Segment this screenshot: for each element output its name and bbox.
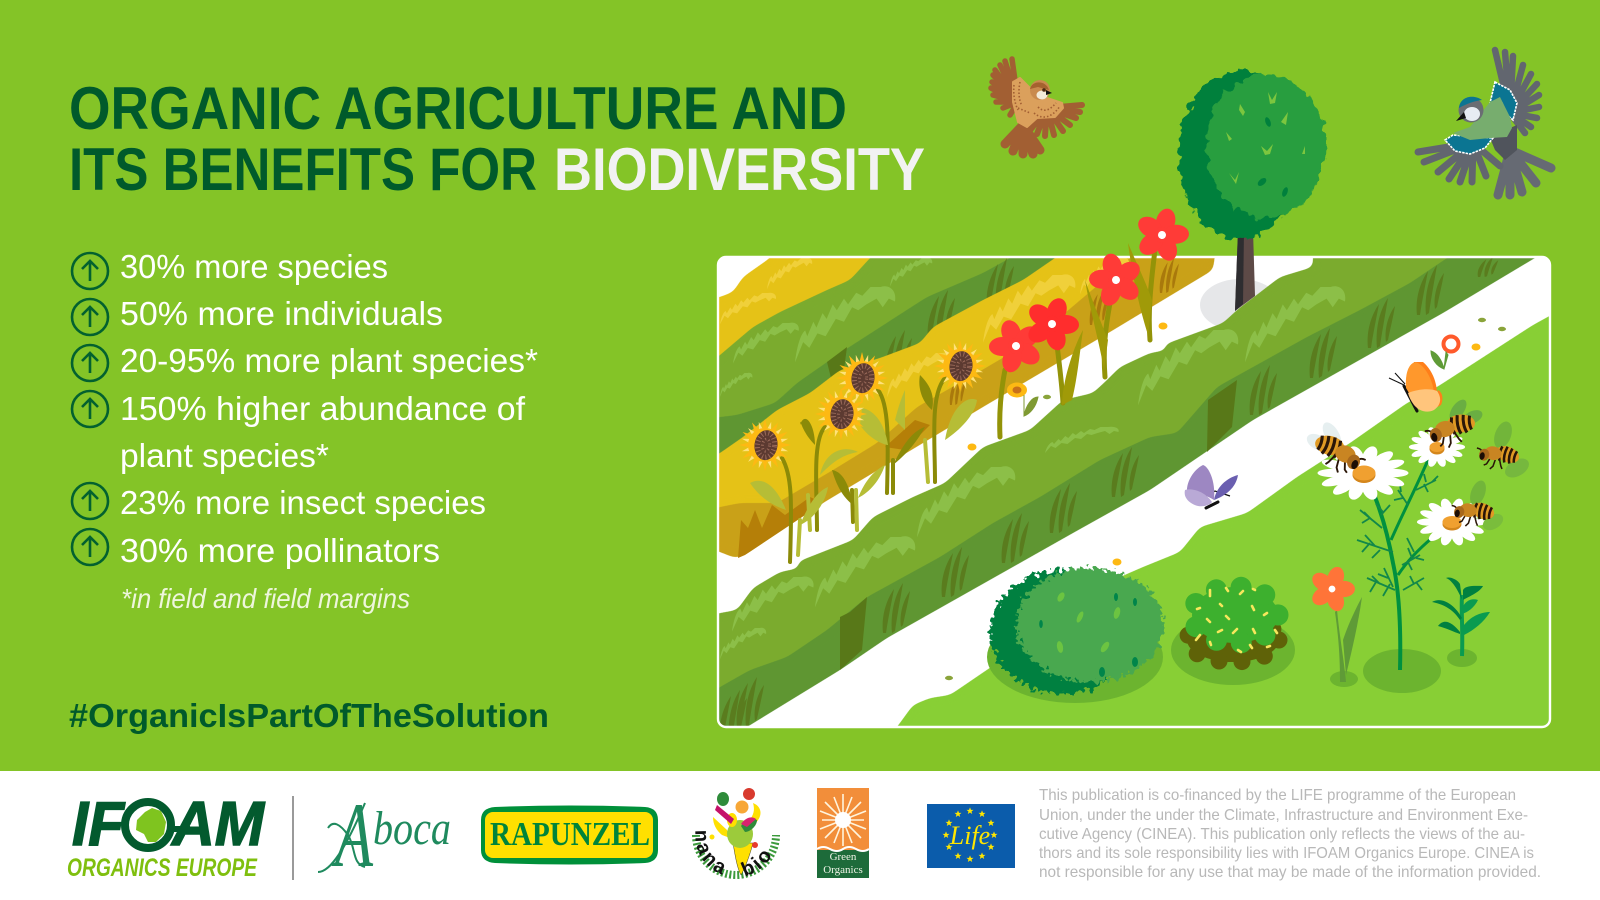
big shrub xyxy=(987,568,1164,703)
logo: IFOAM Organics Europe xyxy=(67,790,265,882)
tree canopy xyxy=(1178,71,1326,239)
disclaimer: cutive Agency (CINEA). This publication only reflects the views of the au- xyxy=(1039,826,1525,843)
logo: nanabio: nana xyxy=(695,831,724,874)
red flowers xyxy=(980,202,1197,437)
disclaimer: not responsible for any use that may be made of the information provided. xyxy=(1039,864,1541,881)
footer band xyxy=(0,771,1600,900)
daisy heads xyxy=(1318,445,1408,501)
blue tit xyxy=(1418,50,1551,195)
yellow crop row with sunflowers xyxy=(700,240,1217,558)
small green plant xyxy=(1432,577,1490,667)
sparrow body xyxy=(1013,78,1063,127)
sparrow tail xyxy=(1005,125,1040,154)
list item: 50% more individuals: 50% more individuals xyxy=(120,295,443,332)
tit wing bands xyxy=(1445,135,1493,154)
list item: 20-95% more plant species: 20-95% more plant species* xyxy=(120,342,538,379)
purple butterfly xyxy=(1185,465,1238,508)
sparrow left wing xyxy=(991,59,1018,115)
sunflowers xyxy=(736,337,989,562)
logo: IFOAM Organics Europe: IF xyxy=(72,790,126,859)
disclaimer: This publication is co-financed by the LIFE programme of the European xyxy=(1039,787,1516,804)
logo: Green Organics xyxy=(817,788,869,878)
bee on lower daisy xyxy=(1449,478,1506,534)
bee on top daisy xyxy=(1422,397,1485,452)
logo: Aboca: boca xyxy=(373,802,451,855)
hashtag: #OrganicIsPartOfTheSolution xyxy=(69,697,549,734)
yellow-speckled bush xyxy=(1171,587,1295,685)
sparrow right wing xyxy=(1031,105,1082,136)
meadow xyxy=(898,316,1549,726)
logo: Rapunzel xyxy=(481,806,658,864)
panel: farmland illustration xyxy=(716,256,1552,728)
logo: IFOAM Organics Europe: ORGANICS EUROPE xyxy=(67,854,258,882)
sparrow head xyxy=(1030,80,1052,100)
title: BIODIVERSITY xyxy=(554,136,925,203)
yellow crop strip xyxy=(719,258,870,356)
sunflower heads xyxy=(736,337,989,474)
list item: 150% higher abundance: 150% higher abundance of xyxy=(120,390,526,427)
logo: Aboca xyxy=(318,784,451,886)
disclaimer: Union, under the under the Climate, Infrastructure and Environment Exe- xyxy=(1039,807,1528,824)
logo: EU LIFE xyxy=(927,804,1015,868)
panel border xyxy=(718,257,1550,727)
title: ITS BENEFITS FOR xyxy=(69,136,537,203)
list item: 150% higher abundance xyxy=(72,390,526,474)
daisy plant xyxy=(1318,427,1487,693)
benefits list xyxy=(72,248,538,569)
disclaimer: thors and its sole responsibility lies with IFOAM Organics Europe. CINEA is xyxy=(1039,845,1534,862)
tree trunk xyxy=(1235,230,1255,311)
disclaimer xyxy=(1039,787,1541,881)
sparrow xyxy=(991,59,1082,154)
orange butterfly xyxy=(1389,362,1442,412)
list item: 23% more insect species: 23% more insect species xyxy=(120,484,486,521)
logo: Green Organics: Green xyxy=(830,851,857,863)
list item: 150% higher abundance: plant species* xyxy=(120,437,329,474)
tit upper wing xyxy=(1495,50,1539,133)
bees xyxy=(1304,397,1532,534)
bee with pale wings xyxy=(1304,419,1370,480)
footnote: *in field and field margins xyxy=(121,583,410,614)
logo: Green Organics: Organics xyxy=(823,864,863,876)
green crop row, front xyxy=(719,258,1535,726)
bee flying right xyxy=(1473,419,1532,481)
small flowers and dots xyxy=(945,318,1506,680)
logo: nanabio: bio xyxy=(740,851,770,876)
footer divider xyxy=(292,796,294,880)
list item: 30% more pollinators: 30% more pollinators xyxy=(120,532,440,569)
list item: 30% more species: 30% more species xyxy=(120,248,388,285)
tit lower wing xyxy=(1418,143,1500,182)
tree shadow xyxy=(1200,279,1268,326)
tit body xyxy=(1453,97,1512,140)
tree xyxy=(1178,71,1326,311)
logo: Rapunzel: RAPUNZEL xyxy=(490,816,650,853)
green crop row, back xyxy=(719,258,1055,454)
logo: nanabio xyxy=(692,788,780,879)
tit head xyxy=(1456,97,1484,122)
title xyxy=(69,75,925,203)
tit tail xyxy=(1498,150,1551,195)
logo: Aboca: A xyxy=(331,784,374,886)
logo: EU LIFE: Life xyxy=(949,821,990,850)
orange flower xyxy=(1302,560,1362,687)
title: ORGANIC AGRICULTURE AND xyxy=(69,75,847,142)
logo: IFOAM Organics Europe: AM xyxy=(170,790,265,859)
